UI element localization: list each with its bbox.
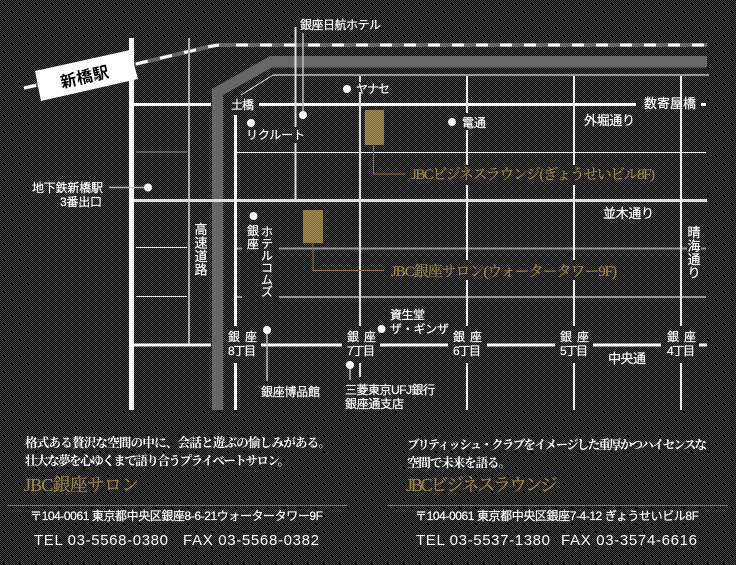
label: Ginza vertical: 銀	[247, 224, 259, 238]
label: expressway: 路	[194, 262, 208, 278]
leader: JBC Ginza salon	[313, 243, 384, 270]
label: Hotel Comz: ズ	[261, 284, 273, 299]
label: Ginza 8-chome	[228, 330, 257, 358]
label: Dentsu: 電通	[462, 116, 486, 130]
label: The Ginza: ザ・ギンザ	[390, 322, 449, 336]
panel: JBC business lounge	[387, 437, 727, 549]
label: Ginza vertical: 座	[247, 237, 259, 251]
label: Hotel Comz: テ	[261, 237, 273, 251]
leader: JBC business lounge	[374, 145, 405, 174]
building: JBC Ginza salon	[303, 210, 323, 243]
label: MUFJ bank: 三菱東京UFJ銀行	[345, 383, 435, 397]
label: Chuo-dori: 中央通	[608, 351, 646, 366]
description line 2: 壮大な夢を心ゆくまで語り合うプライベートサロン。	[25, 453, 290, 468]
map labels	[32, 18, 701, 411]
label: Ginza 4-chome: 4丁目	[667, 344, 695, 358]
label: Yanase: ヤナセ	[356, 82, 390, 96]
rule	[7, 505, 347, 506]
panel: JBC Ginza salon	[7, 435, 347, 549]
gray cross streets	[237, 248, 706, 297]
label: Shiseido: 資生堂	[390, 308, 425, 322]
label: bank branch: 銀座通支店	[345, 397, 404, 411]
label: Namiki-dori: 並木通り	[603, 206, 654, 221]
Tsuchibashi street	[134, 103, 706, 106]
main vertical road at station	[129, 38, 134, 410]
description: 格式ある贅沢な空間の中に、会話と遊ぶの愉しみがある。	[25, 435, 331, 450]
label: Sotobori-dori: 外堀通り	[584, 113, 635, 128]
label: Hotel Comz: ル	[261, 249, 273, 263]
label: Ginza 7-chome: 銀 座	[347, 330, 376, 344]
label: subway exit: 地下鉄新橋駅	[32, 180, 103, 195]
vertical streets	[234, 115, 237, 410]
label: Ginza 4-chome: 銀 座	[667, 330, 696, 344]
label: Ginza 7-chome	[347, 330, 376, 358]
phone: TEL 03-5568-0380	[34, 532, 168, 549]
left block streets	[136, 151, 187, 153]
label: Hotel Comz: コ	[261, 261, 273, 275]
label: Nikko hotel: 銀座日航ホテル	[300, 18, 381, 32]
label: Hakuhinkan: 銀座博品館	[261, 384, 320, 399]
label: Ginza 5-chome	[560, 330, 589, 358]
label: Ginza 6-chome: 銀 座	[453, 330, 482, 344]
road along expressway	[273, 74, 709, 76]
label: expressway: 道	[194, 249, 208, 264]
label: Recruit: リクルート	[246, 128, 305, 142]
label: Ginza 6-chome: 6丁目	[453, 344, 481, 358]
station sign: Shimbashi	[35, 50, 138, 101]
thin side roads	[188, 38, 190, 345]
label: JBC business lounge callout: JBCビジネスラウンジ(ぎょうせいビル8F)	[411, 166, 655, 183]
fax: FAX 03-3574-6616	[561, 532, 697, 549]
expressway band	[212, 56, 707, 410]
label: Harumi-dori: 海	[687, 238, 701, 254]
label: Ginza 6-chome	[453, 330, 482, 358]
rule	[387, 505, 727, 506]
description line 2: 空間で未来を語る。	[407, 455, 511, 470]
label: Ginza 4-chome	[667, 330, 696, 358]
label: Harumi-dori: 通	[687, 252, 701, 267]
label: Hotel Comz: ム	[261, 273, 273, 287]
station sign: Shimbashi: 新橋駅	[59, 62, 111, 92]
label: JBC Ginza salon callout: JBC銀座サロン(ウォータータワー9F)	[391, 263, 617, 280]
label: Ginza 7-chome: 7丁目	[347, 344, 375, 358]
heading: JBCビジネスラウンジ	[406, 475, 558, 495]
label: Ginza 8-chome: 銀 座	[228, 330, 257, 344]
label: Ginza 8-chome: 8丁目	[228, 344, 256, 358]
label: Ginza 5-chome: 銀 座	[560, 330, 589, 344]
heading: JBC銀座サロン	[24, 475, 139, 495]
address: 〒104-0061 東京都中央区銀座7-4-12 ぎょうせいビル8F	[415, 508, 699, 523]
label: Hotel Comz: ホ	[261, 225, 273, 239]
label: expressway: 高	[194, 222, 208, 237]
cross street	[236, 152, 706, 154]
description: ブリティッシュ・クラブをイメージした重厚かつハイセンスな	[407, 437, 707, 452]
road network	[132, 27, 709, 410]
landmark dots and stems	[109, 33, 456, 381]
address: 〒104-0061 東京都中央区銀座8-6-21ウォータータワー9F	[30, 508, 323, 523]
label: Harumi-dori: 晴	[687, 225, 701, 240]
label: expressway: 速	[194, 236, 208, 250]
fax: FAX 03-5568-0382	[183, 532, 319, 549]
label: Sukiyabashi: 数寄屋橋	[644, 96, 696, 111]
Namiki cross street	[134, 199, 707, 202]
label: Ginza 5-chome: 5丁目	[560, 344, 588, 358]
label: Harumi-dori: り	[687, 266, 701, 280]
label: exit number: 3番出口	[60, 195, 102, 209]
label: Tsuchibashi: 土橋	[231, 98, 254, 112]
building: JBC business lounge	[365, 110, 384, 145]
railway line	[24, 45, 707, 88]
phone: TEL 03-5537-1380	[416, 532, 550, 549]
Chuo-dori	[134, 344, 707, 346]
